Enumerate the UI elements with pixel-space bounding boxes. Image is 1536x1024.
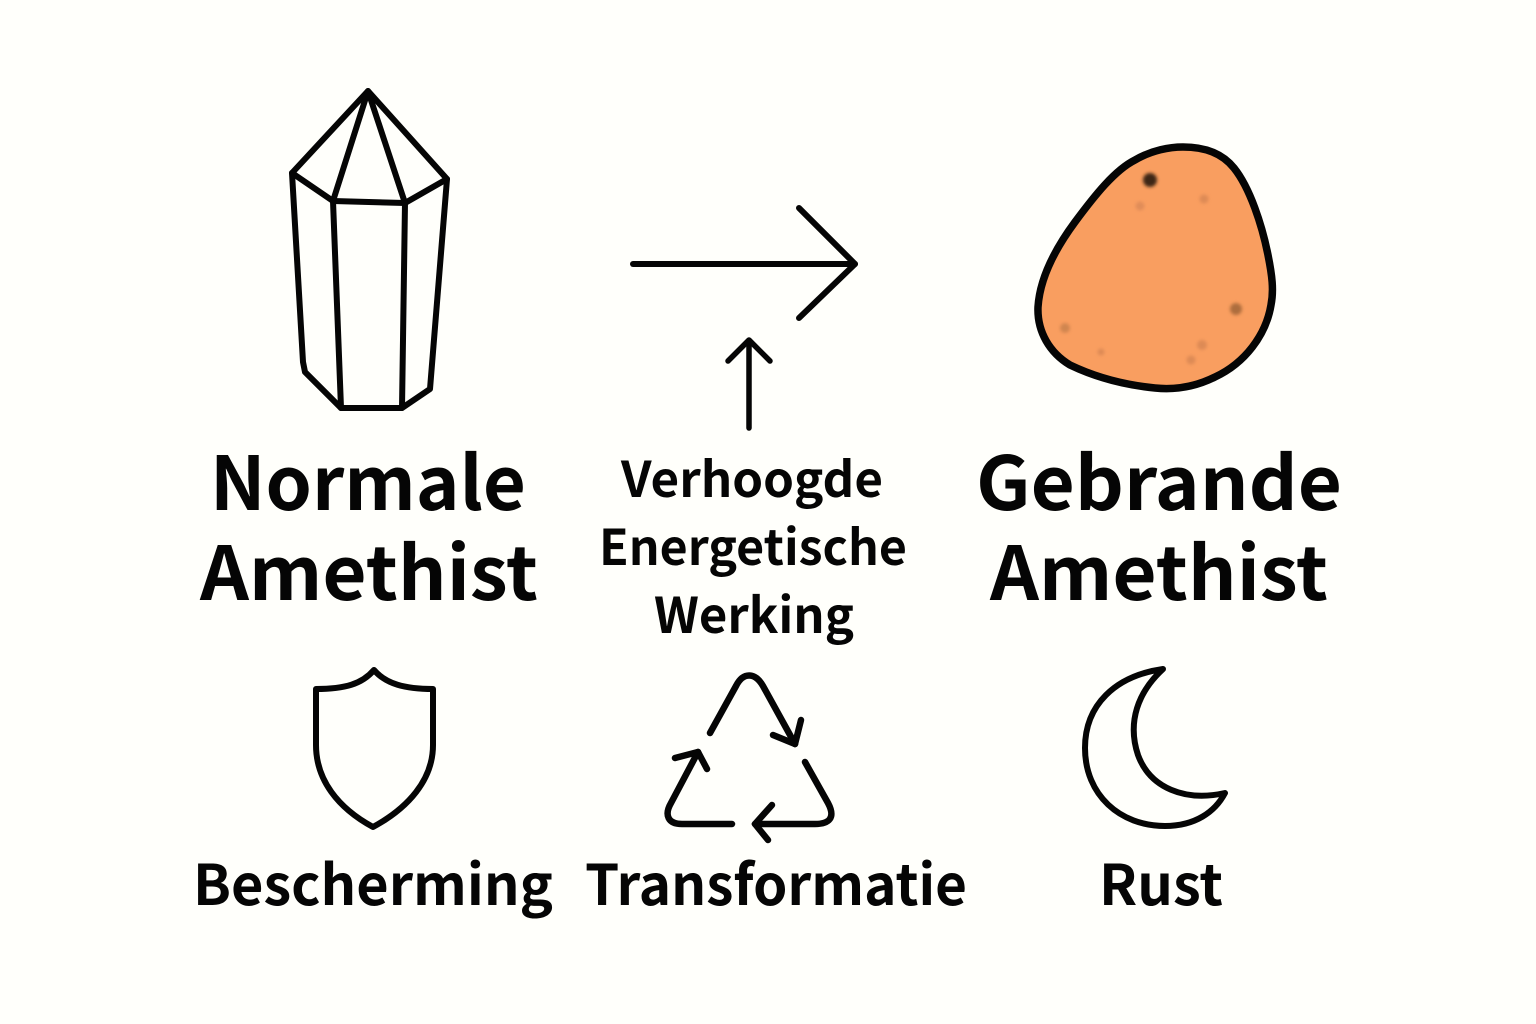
- heading: normal amethyst: [199, 425, 538, 622]
- heading: normal amethyst: Normale: [210, 425, 526, 532]
- heading: burnt amethyst: [976, 425, 1342, 622]
- label: transformation: Transformatie: [585, 841, 967, 922]
- text: increased energetic working: Verhoogde: [620, 441, 883, 512]
- heading: burnt amethyst: Amethist: [989, 515, 1328, 622]
- icon: recycle arrows: [668, 676, 831, 840]
- heading: normal amethyst: Amethist: [199, 515, 538, 622]
- arrow: upward energy arrow: [728, 340, 770, 428]
- text: increased energetic working: Werking: [654, 577, 854, 648]
- text: increased energetic working: [599, 441, 907, 648]
- icon: burnt amethyst stone: [1038, 147, 1272, 389]
- icon: shield: [316, 670, 433, 827]
- text: increased energetic working: Energetische: [599, 509, 907, 580]
- label: rest: Rust: [1099, 841, 1223, 922]
- heading: burnt amethyst: Gebrande: [976, 425, 1342, 532]
- arrow: main transformation arrow: [633, 208, 855, 318]
- icon: crescent moon: [1085, 669, 1225, 826]
- icon: amethyst crystal: [292, 91, 447, 408]
- label: protection: Bescherming: [193, 841, 553, 922]
